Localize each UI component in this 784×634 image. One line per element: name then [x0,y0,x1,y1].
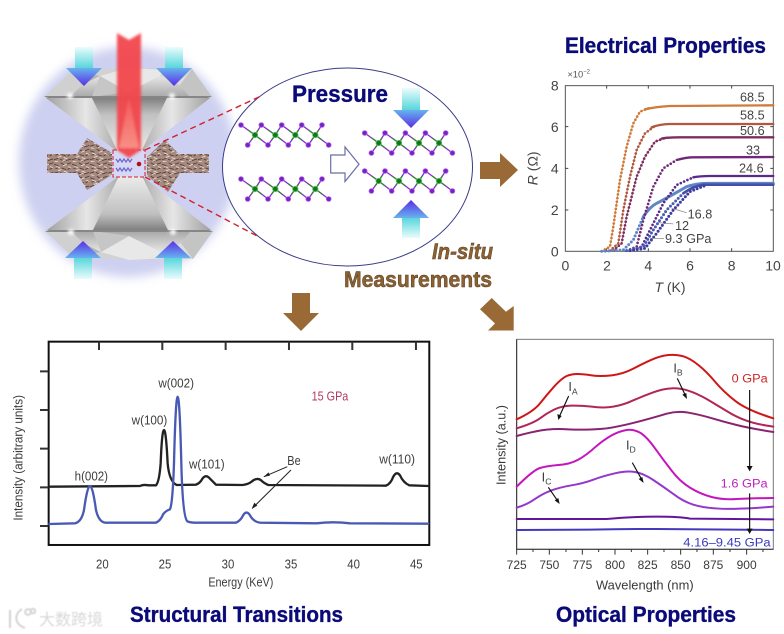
chart: structural transitions: 35 [285,557,297,572]
heading: electrical properties: Electrical Properties [565,33,766,58]
chart: electrical resistance: 24.6 [739,162,764,176]
arrow: pressure down [393,88,429,128]
arrow: bottom left [65,241,101,279]
arrow: top left [66,47,102,86]
gasket [47,138,209,192]
arrow: to structural [283,293,319,331]
chart: structural transitions: w(101) [188,456,225,471]
chart: electrical resistance: 12 [675,219,689,233]
chart: optical properties: Intensity (a.u.) [494,405,508,485]
chart: optical properties: I [542,470,545,484]
chart: structural transitions: h(002) [75,469,108,484]
heading: pressure: Pressure [292,81,388,108]
chart: electrical resistance: T (K) [654,279,686,295]
chart: electrical resistance: 2 [551,202,559,218]
chart: electrical resistance: 4 [644,258,652,274]
sample chamber [113,150,145,177]
background halo [19,47,237,277]
chart: structural transitions: w(100) [131,412,167,427]
spectrum: black [49,430,428,487]
chart: electrical resistance [524,70,781,295]
chart: structural transitions: 20 [96,557,109,572]
chart: structural transitions: w(002) [157,376,194,391]
chart: optical properties: I [626,438,630,452]
chart: structural transitions: w(110) [378,452,415,467]
chart: electrical resistance: 9.3 GPa [665,232,712,246]
heading: optical properties: Optical Properties [556,602,736,627]
bottom anvil [45,176,213,260]
chart: optical properties: Wavelength (nm) [596,579,694,593]
chart: optical properties: D [630,445,636,455]
chart: electrical resistance: ×10 [567,70,583,80]
chart: optical properties: C [545,477,551,487]
panel: pressure ellipse [222,68,472,266]
chart: structural transitions: 15 GPa [312,389,349,404]
arrow: to optical [480,298,514,330]
chart: optical properties: 850 [671,558,691,572]
chart: optical properties: 775 [572,558,593,572]
molecular layers: separated [239,123,331,201]
chart: electrical resistance: 33 [746,144,760,158]
diagram: diamond anvil cell [44,33,213,279]
chart: optical properties: 4.16–9.45 GPa [683,536,771,550]
arrow: hollow transition [331,147,359,182]
chart: electrical resistance: −2 [583,70,591,76]
chart: electrical resistance: 0 [561,258,569,274]
chart: structural transitions: Energy (KeV) [208,575,273,590]
chart: electrical resistance: 68.5 [740,91,765,105]
chart: structural transitions: Be [287,453,301,468]
chart: optical properties: 725 [507,558,527,572]
molecular layers: compressed [362,131,455,193]
chart: optical properties: 825 [638,558,658,572]
chart: electrical resistance: 10 [765,258,781,274]
arrow: top right [156,47,192,86]
chart: structural transitions: 45 [410,557,423,572]
chart: electrical resistance: 8 [551,78,559,94]
arrow: pressure up [393,200,429,238]
heading: structural transitions: Structural Transitions [130,602,343,627]
label: in-situ: In-situ [432,239,494,264]
chart: electrical resistance: 0 [551,244,559,260]
chart: optical properties: A [572,386,578,396]
chart: structural transitions: 30 [222,557,234,572]
chart: optical properties: 750 [539,558,560,572]
chart: structural transitions [11,342,429,590]
label: measurements: Measurements [344,267,492,292]
chart: optical properties: 0 GPa [732,371,768,385]
chart: electrical resistance: 4 [551,160,559,176]
chart: optical properties: 900 [737,558,757,572]
chart: optical properties: 875 [703,558,724,572]
chart: optical properties [494,339,773,593]
laser beam [117,33,141,158]
chart: structural transitions: 40 [347,557,360,572]
watermark text: 大数跨境 [39,606,103,630]
spectrum: blue [49,397,428,524]
watermark [10,606,103,630]
chart: optical properties: 800 [605,558,625,572]
dashed zoom lines [145,96,260,238]
arrow: bottom right [155,241,191,279]
chart: optical properties: I [568,380,572,394]
chart: structural transitions: Intensity (arbitrary units) [11,395,26,521]
chart: structural transitions: 25 [159,557,171,572]
chart: electrical resistance: 2 [603,258,611,274]
chart: electrical resistance: 16.8 [688,208,712,222]
chart: electrical resistance: 6 [551,119,559,135]
chart: electrical resistance: R (Ω) [524,151,540,185]
chart: electrical resistance: 6 [686,258,694,274]
chart: electrical resistance: 50.6 [740,124,765,138]
chart: optical properties: B [677,368,683,378]
arrow: to electrical [480,153,518,187]
chart: optical properties: I [673,361,677,375]
top anvil [44,68,212,152]
chart: electrical resistance: 8 [728,258,736,274]
chart: optical properties: 1.6 GPa [721,476,768,490]
chart: electrical resistance: 58.5 [740,108,765,122]
watermark icon [10,609,35,628]
